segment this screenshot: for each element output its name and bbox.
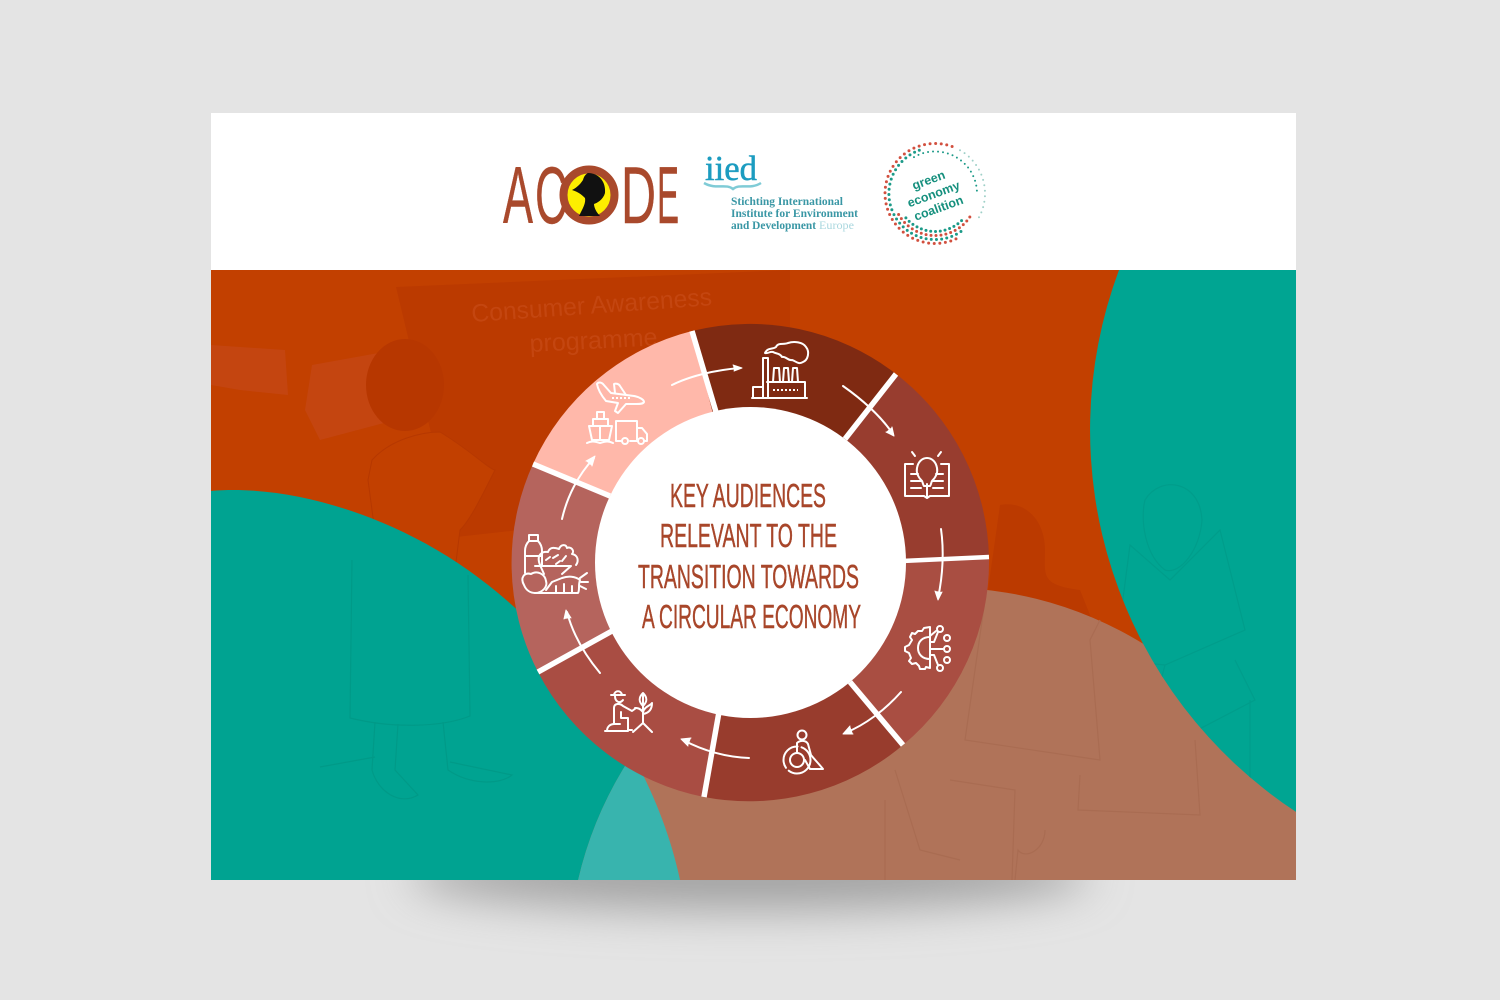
logo: ACODE: A	[503, 151, 533, 241]
icon: truck	[616, 421, 647, 444]
icon: gear with circuit	[905, 626, 950, 671]
central title: KEY AUDIENCES	[670, 478, 826, 515]
ring segment: producers	[692, 324, 896, 562]
logo: ACODE	[503, 151, 679, 241]
logo: iied: iied	[705, 149, 757, 188]
logo: iied: Europe	[819, 220, 854, 232]
panel: logo header	[211, 113, 1296, 270]
background illustration: classroom board	[396, 270, 790, 537]
central title: A CIRCULAR ECONOMY	[642, 599, 861, 636]
logo: green economy coalition: coalition	[912, 193, 965, 224]
card drop shadow	[410, 840, 1090, 910]
panel: illustrated background	[211, 270, 1296, 880]
logo: ACODE: D	[621, 151, 656, 241]
icon: food and packaging	[522, 535, 588, 593]
background illustration: seated figure head	[988, 504, 1100, 640]
background illustration: seated figures on brown	[1099, 620, 1100, 621]
logo: iied: Institute for Environment	[731, 208, 858, 220]
background illustration: person on right teal	[1122, 491, 1250, 778]
ring segment: research and innovators	[750, 374, 989, 562]
logo: iied: and Development	[731, 220, 816, 232]
shape: right teal circle	[1090, 270, 1296, 812]
ring centre	[595, 407, 906, 718]
ring dividers	[533, 331, 989, 797]
background illustration: board text	[472, 292, 711, 357]
logo: ACODE: C	[535, 151, 567, 241]
central title: TRANSITION TOWARDS	[638, 559, 859, 596]
shape: translucent brown circle	[578, 588, 1296, 880]
shape: left teal circle	[211, 490, 625, 880]
logo: green economy coalition	[885, 143, 985, 243]
icon: book with light bulb	[905, 452, 949, 498]
background illustration: trees	[211, 345, 395, 440]
ring segment: technology	[750, 557, 989, 745]
logo: green economy coalition: green	[910, 168, 947, 193]
logo: green economy coalition: economy	[905, 178, 962, 210]
arrows between segments	[562, 365, 943, 758]
icon: ship	[587, 412, 613, 443]
background illustration: teacher skirt on teal	[320, 560, 512, 799]
icon: person in wheelchair	[784, 730, 823, 774]
logo: iied: Stichting International	[731, 196, 843, 208]
icons in segments	[522, 342, 950, 774]
background illustration: teacher upper body	[366, 339, 460, 562]
central title	[638, 478, 861, 636]
background illustration: board text: Consumer Awareness	[470, 283, 713, 328]
logo: iied	[704, 149, 858, 232]
ring segment: transport	[533, 331, 750, 562]
central title: RELEVANT TO THE	[660, 518, 837, 555]
ring segment: farmers	[538, 562, 750, 797]
icon: factory	[752, 342, 808, 398]
ring segment: inclusion	[704, 562, 903, 801]
panel: logo header: E	[657, 151, 679, 241]
icon: plane	[597, 382, 644, 413]
background illustration: board text: programme	[529, 323, 658, 358]
shape: teal and brown overlap	[578, 766, 680, 880]
ring segment: consumer goods	[512, 464, 750, 672]
icon: farmer planting	[605, 691, 652, 732]
ring diagram: circular economy audiences	[512, 324, 989, 801]
